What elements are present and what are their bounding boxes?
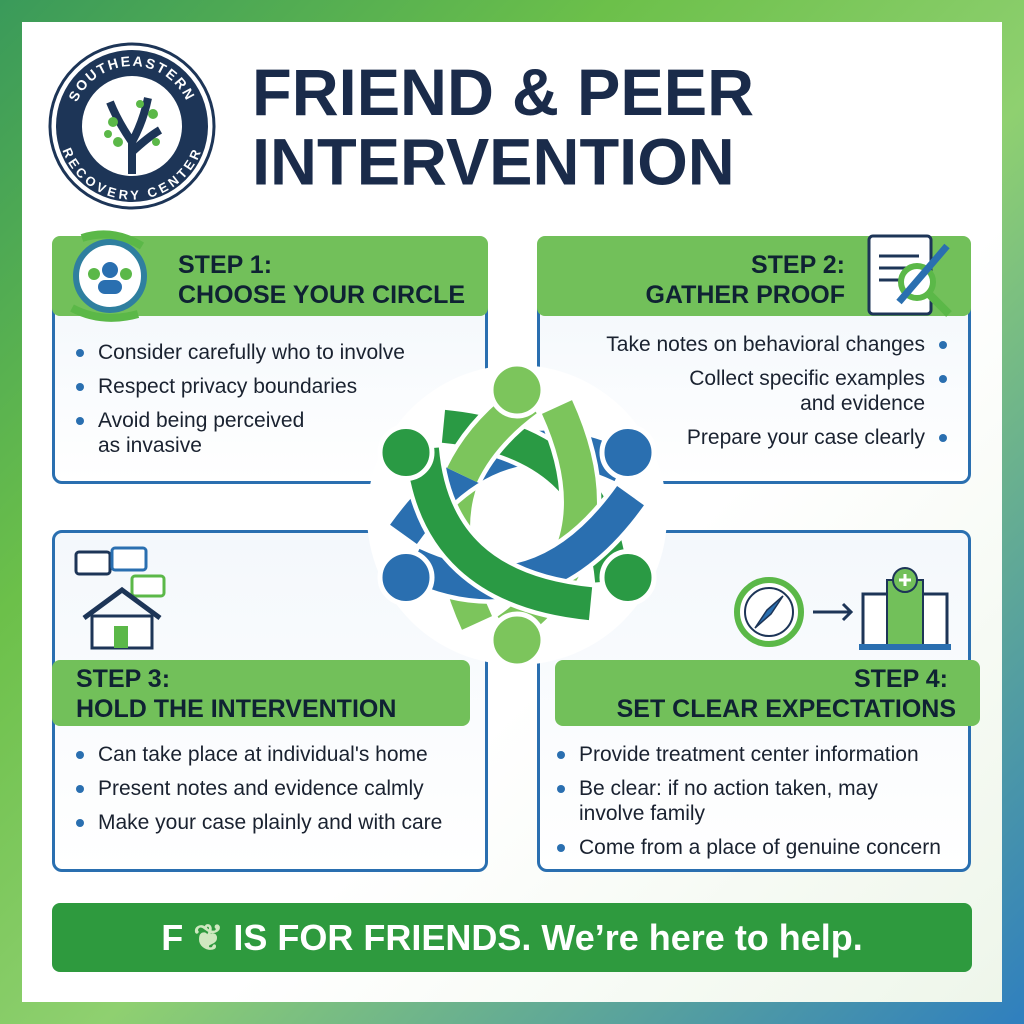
step 2 header [537, 236, 971, 316]
title [252, 55, 754, 199]
step 3 bullets [76, 743, 442, 834]
step 2 header: GATHER PROOF [645, 281, 845, 309]
step 1 header [52, 236, 488, 316]
step 4 bullets [557, 743, 941, 859]
step 4 bullets: Be clear: if no action taken, may [579, 777, 878, 800]
icon: notepad magnifier [868, 234, 952, 317]
logo: RECOVERY CENTER [62, 148, 201, 200]
step 2 bullets [606, 333, 947, 449]
step 2 bullets: Prepare your case clearly [687, 426, 925, 449]
step 3 header: HOLD THE INTERVENTION [76, 695, 396, 723]
step 3 bullets: Can take place at individual's home [98, 743, 428, 766]
title: INTERVENTION [252, 124, 735, 199]
step 4 bullets: involve family [579, 802, 705, 825]
step 4 header [555, 660, 980, 726]
panel: step 4 [537, 530, 980, 872]
step 3 header: STEP 3: [76, 665, 170, 693]
step 4 bullets: Provide treatment center information [579, 743, 919, 766]
step 1 bullets: Avoid being perceived [98, 409, 304, 432]
panel: step 2 [537, 234, 971, 484]
step 3 header [52, 660, 470, 726]
step 4 header: STEP 4: [854, 665, 948, 693]
step 2 header: STEP 2: [751, 251, 845, 279]
title: FRIEND & PEER [252, 55, 754, 129]
step 4 header: SET CLEAR EXPECTATIONS [617, 695, 956, 723]
step 3 bullets: Present notes and evidence calmly [98, 777, 424, 800]
step 1 bullets: Consider carefully who to involve [98, 341, 405, 364]
icon: compass to hospital [734, 567, 951, 650]
step 1 bullets: as invasive [98, 434, 202, 457]
panel: step 1 [52, 230, 488, 484]
step 1 bullets: Respect privacy boundaries [98, 375, 357, 398]
panel: step 3 [52, 530, 488, 872]
center emblem: interlocking people [368, 366, 666, 664]
icon: circle of people [70, 230, 147, 322]
step 2 bullets: Collect specific examples [689, 367, 925, 390]
logo [48, 42, 216, 210]
icon: house with speech bubbles [74, 546, 166, 650]
step 3 bullets: Make your case plainly and with care [98, 811, 442, 834]
step 1 header: CHOOSE YOUR CIRCLE [178, 281, 465, 309]
step 4 bullets: Come from a place of genuine concern [579, 836, 941, 859]
step 2 bullets: and evidence [800, 392, 925, 415]
step 1 header: STEP 1: [178, 251, 272, 279]
step 1 bullets [76, 341, 405, 457]
footer banner [52, 903, 972, 972]
step 2 bullets: Take notes on behavioral changes [606, 333, 925, 356]
footer banner: F ❦ IS FOR FRIENDS. We’re here to help. [161, 917, 863, 958]
logo: SOUTHEASTERN [69, 56, 194, 102]
